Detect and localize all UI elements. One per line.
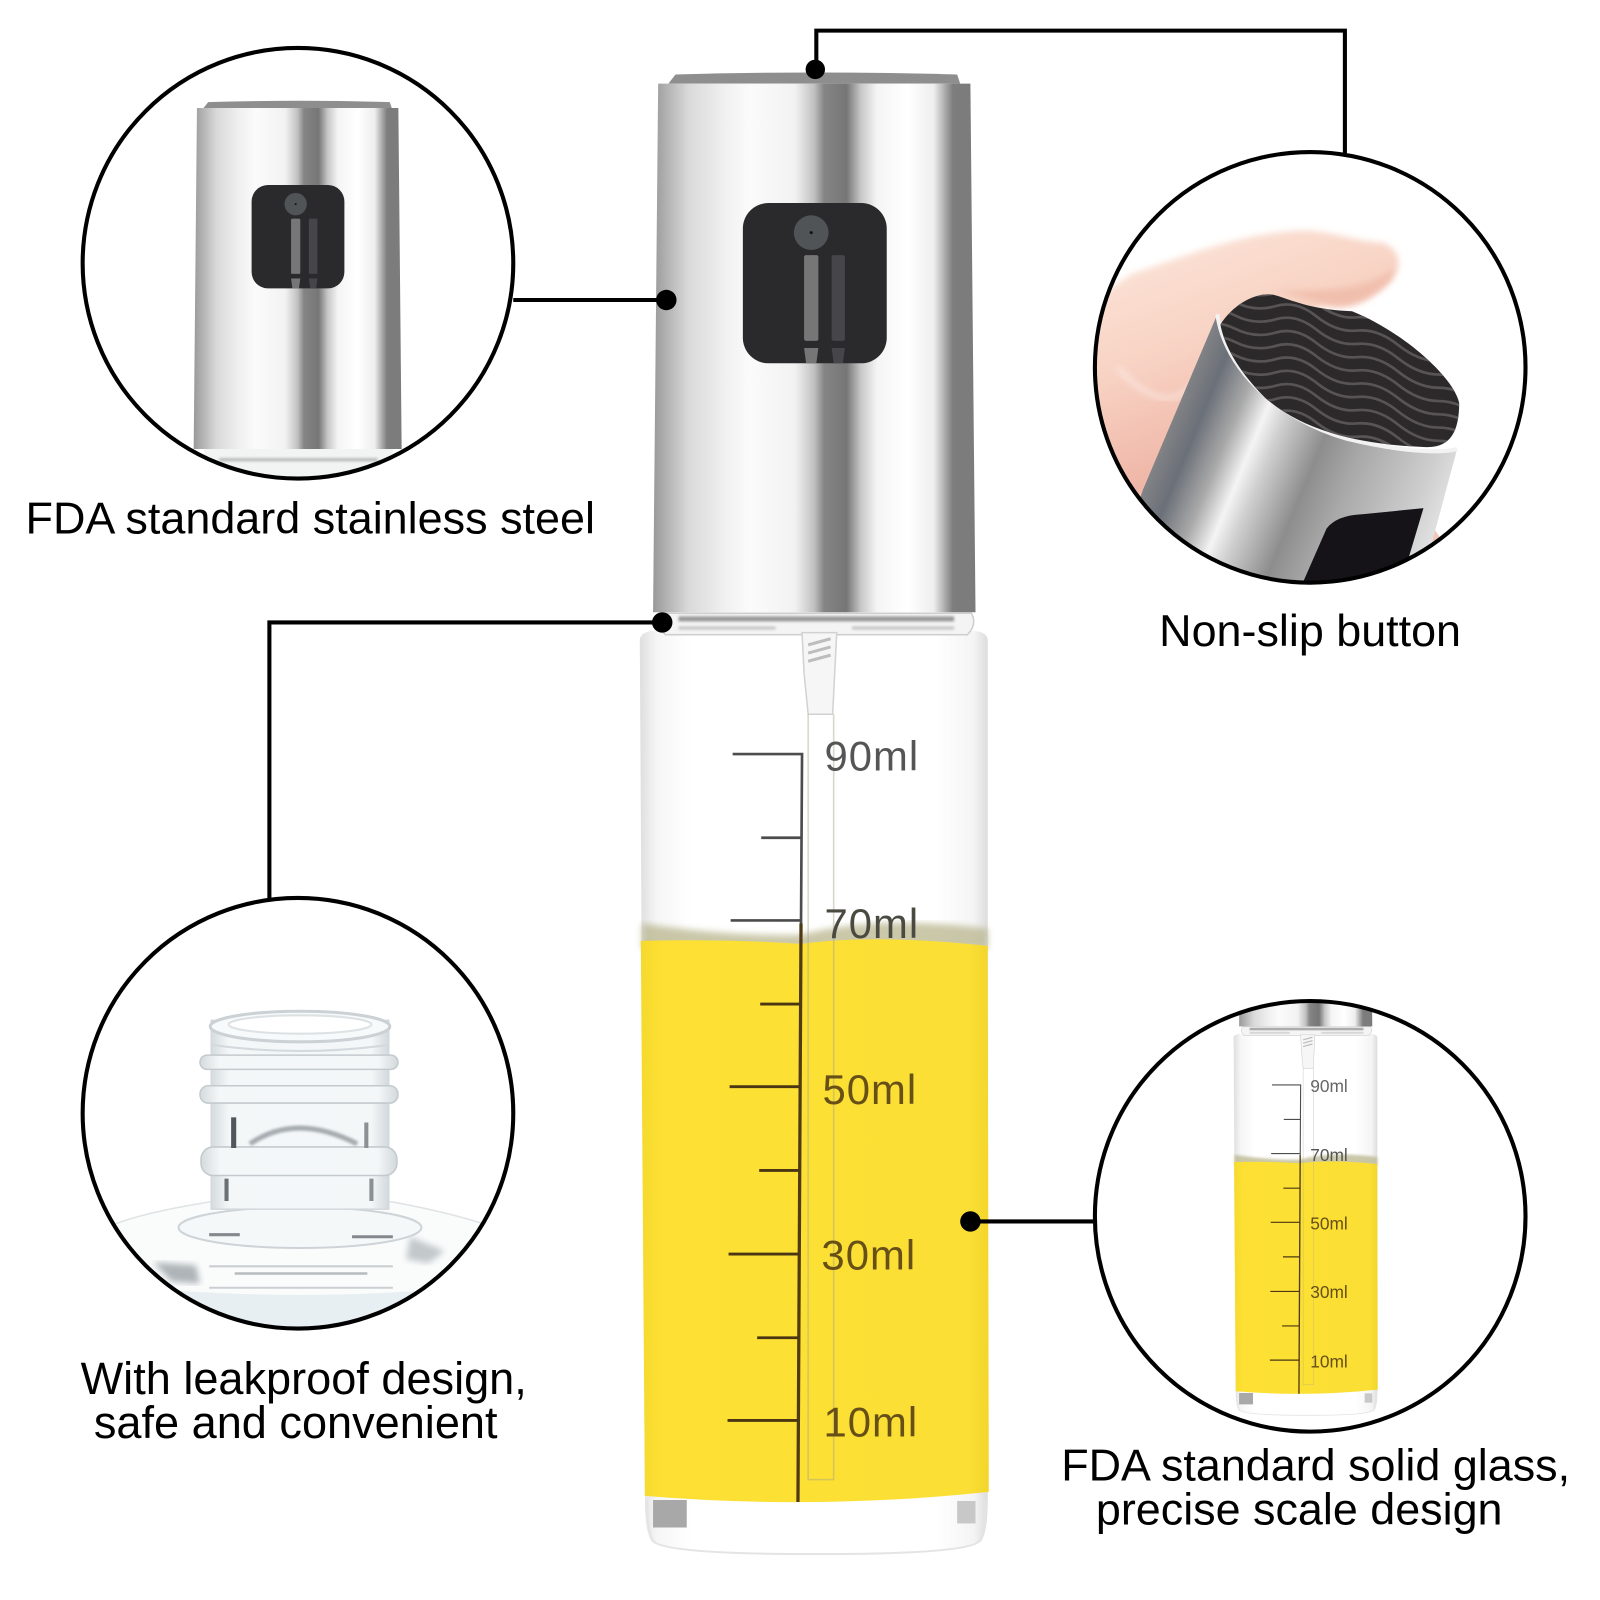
caption: leakproof design: With leakproof design, (81, 1353, 527, 1404)
caption: non-slip button: Non-slip button (1159, 605, 1461, 656)
bottle shoulder (115, 1201, 481, 1224)
hand photo illustration (1097, 228, 1440, 542)
bottle scale labels: 30ml (821, 1231, 916, 1278)
panel: leakproof glass neck detail (83, 898, 513, 1337)
caption: solid glass: FDA standard solid glass, (1061, 1440, 1570, 1491)
small scale labels: 70ml (1310, 1145, 1348, 1165)
panel: non-slip button detail (1082, 152, 1526, 612)
small scale labels (1310, 1076, 1348, 1371)
tilted steel cap (1140, 314, 1458, 581)
connector: bottle neck to leakproof circle (269, 612, 672, 898)
small scale labels: 90ml (1310, 1076, 1348, 1096)
small scale labels: 10ml (1310, 1351, 1348, 1371)
threaded neck (179, 1011, 421, 1248)
connector: top button to non-slip circle (806, 31, 1347, 153)
bottle scale labels: 10ml (823, 1399, 918, 1446)
bottle scale labels: 50ml (822, 1066, 917, 1113)
small scale labels: 50ml (1310, 1214, 1348, 1234)
panel: stainless steel cap detail (83, 48, 513, 480)
bottle scale labels (821, 732, 919, 1446)
connector: glass body to solid glass circle (960, 1211, 1094, 1232)
ridged rubber button (1220, 294, 1460, 448)
main bottle (640, 72, 989, 1554)
connector: steel cap to stainless steel circle (513, 290, 677, 310)
panel: solid glass scale detail (1092, 999, 1528, 1434)
caption: leakproof design: safe and convenient (94, 1397, 498, 1448)
small scale labels: 30ml (1310, 1282, 1348, 1302)
caption: solid glass: precise scale design (1096, 1483, 1503, 1534)
bottle scale labels: 90ml (824, 732, 919, 779)
bottle scale labels: 70ml (824, 900, 919, 947)
caption: stainless steel: FDA standard stainless steel (26, 493, 595, 544)
